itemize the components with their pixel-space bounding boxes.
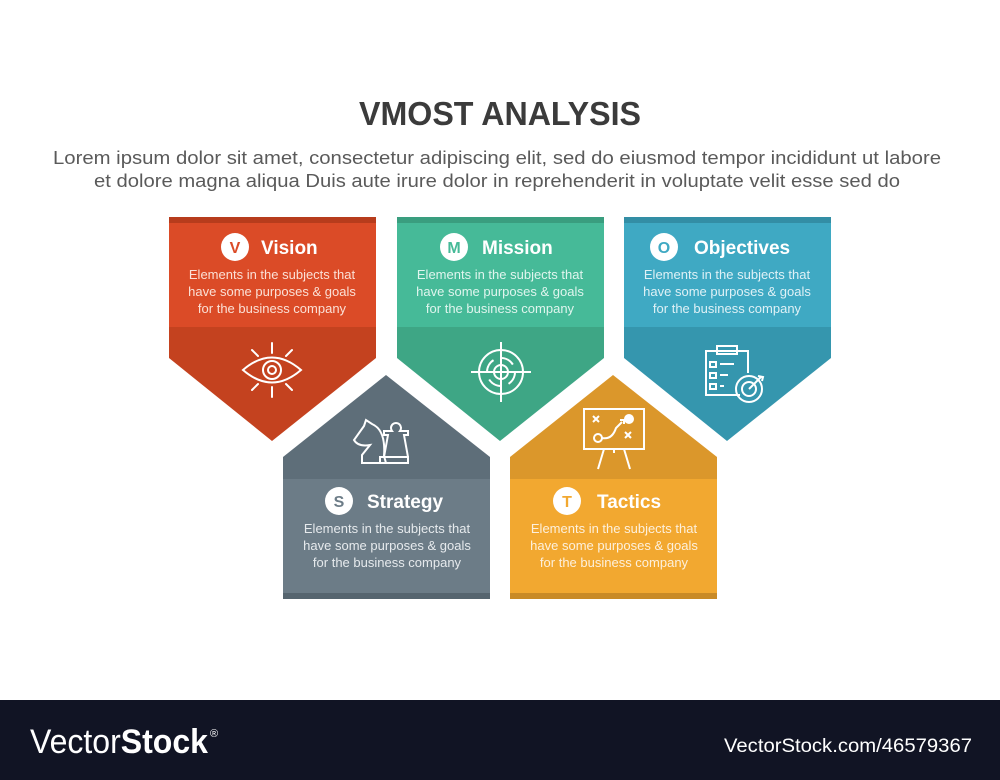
panel: objectives: have some purposes & goals: [643, 284, 811, 299]
panel: tactics: have some purposes & goals: [530, 538, 698, 553]
title: VMOST ANALYSIS: [359, 95, 641, 132]
panel: tactics: [510, 375, 717, 599]
panel: mission: Mission: [482, 238, 553, 259]
panel: mission: Elements in the subjects that: [417, 267, 583, 282]
subtitle: et dolore magna aliqua Duis aute irure dolor in reprehenderit in voluptate velit esse sed do: [94, 171, 900, 191]
panel: strategy: Elements in the subjects that: [304, 521, 470, 536]
panel: vision: V: [230, 240, 241, 257]
panel: vision: Elements in the subjects that: [189, 267, 355, 282]
subtitle: [53, 148, 941, 191]
panel: strategy: S: [334, 494, 345, 511]
panel: objectives: Objectives: [694, 238, 790, 259]
panel: tactics: Elements in the subjects that: [531, 521, 697, 536]
panel: objectives: for the business company: [653, 301, 802, 316]
footer bar: VectorStock.com/46579367: [724, 736, 972, 757]
subtitle: Lorem ipsum dolor sit amet, consectetur adipiscing elit, sed do eiusmod tempor incididunt ut labore: [53, 148, 941, 168]
panel: mission: for the business company: [426, 301, 575, 316]
panel: objectives: O: [658, 240, 670, 257]
panel: objectives: Elements in the subjects that: [644, 267, 810, 282]
panel: tactics: Tactics: [597, 492, 661, 513]
footer bar: ®: [210, 728, 218, 740]
panel: tactics: for the business company: [540, 555, 689, 570]
panel: tactics: T: [562, 494, 572, 511]
panel: strategy: [283, 375, 490, 599]
panel: mission: M: [447, 240, 461, 257]
panel: vision: [169, 217, 376, 441]
panel: vision: Vision: [261, 238, 318, 259]
icon: target: [471, 342, 531, 402]
panel: strategy: have some purposes & goals: [303, 538, 471, 553]
panel: vision: have some purposes & goals: [188, 284, 356, 299]
icon: chess: [354, 420, 408, 463]
footer bar: [0, 700, 1000, 780]
footer bar: VectorStock: [30, 723, 208, 761]
panel: strategy: Strategy: [367, 492, 443, 513]
panel: strategy: for the business company: [313, 555, 462, 570]
panel: vision: for the business company: [198, 301, 347, 316]
panel: objectives: [624, 217, 831, 441]
panel: mission: [397, 217, 604, 441]
icon: eye: [243, 343, 301, 397]
icon: clipboard target: [706, 346, 763, 402]
icon: tactics board: [584, 409, 644, 469]
panel: mission: have some purposes & goals: [416, 284, 584, 299]
